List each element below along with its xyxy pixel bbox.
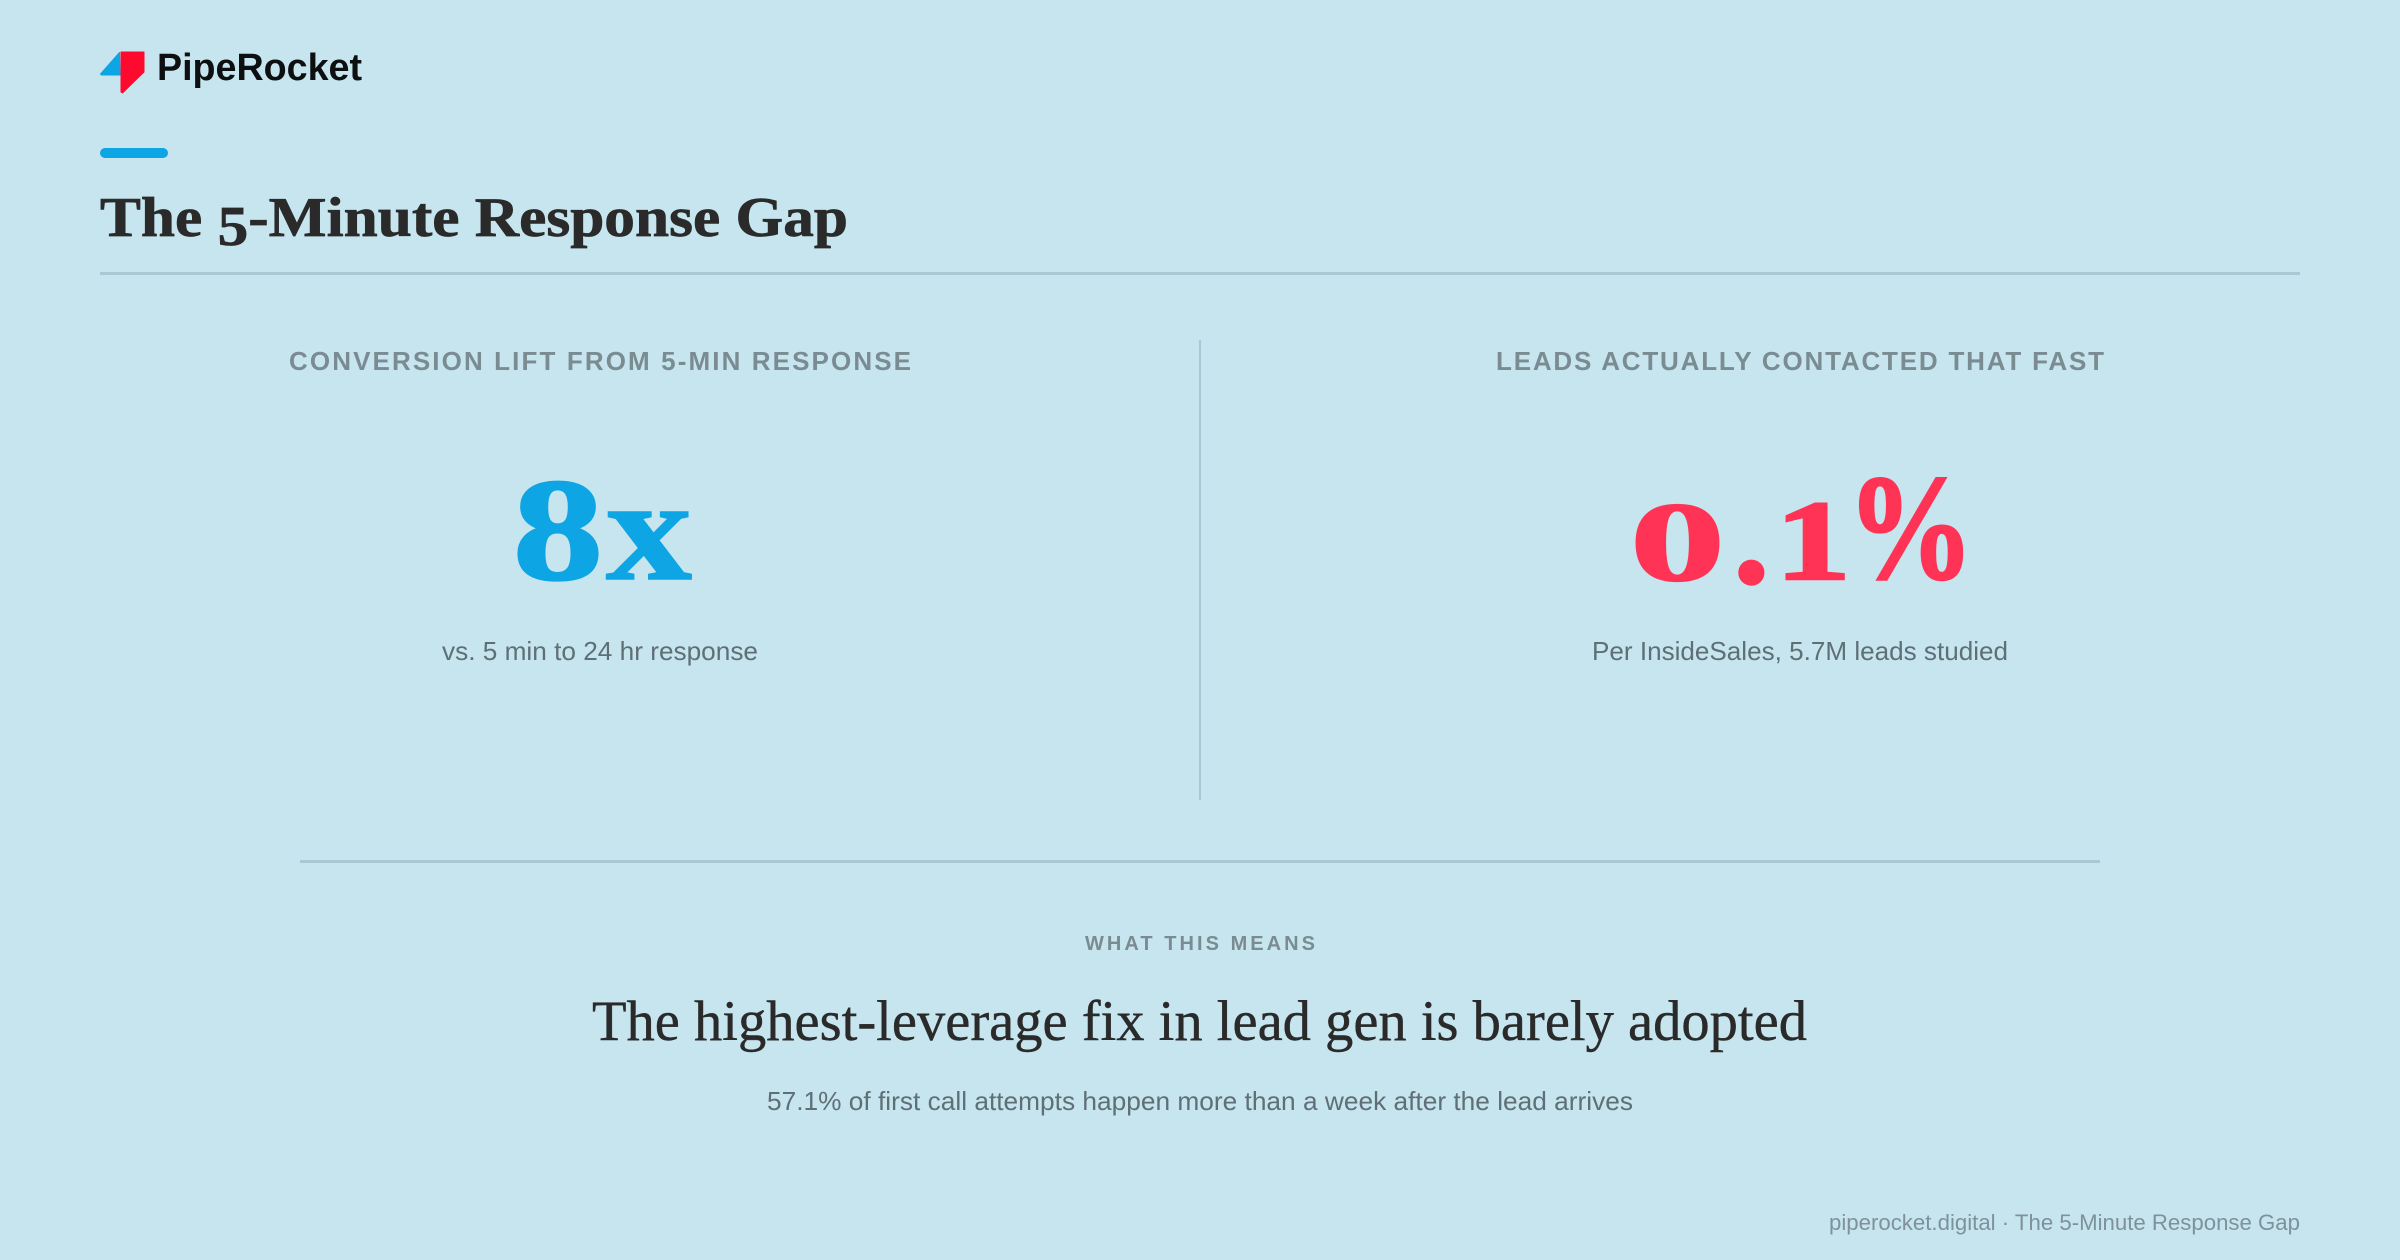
- title: 5: [218, 196, 248, 258]
- big number: 8x: [513, 449, 692, 611]
- title: The: [100, 187, 193, 249]
- big number: 8x: 8: [513, 449, 603, 611]
- eyebrow: WHAT THIS MEANS: [1085, 933, 1315, 955]
- panel: conversion lift: [289, 346, 911, 666]
- accent bar: [100, 148, 168, 158]
- panel heading: LEADS ACTUALLY CONTACTED THAT FAST: [1496, 346, 2104, 376]
- big number: 0.1%: 0: [1630, 480, 1725, 605]
- big number: 0.1%: 1: [1775, 477, 1851, 604]
- wordmark: PipeRocket: [157, 47, 362, 89]
- panel heading: CONVERSION LIFT FROM 5-MIN RESPONSE: [289, 346, 911, 376]
- caption: vs. 5 min to 24 hr response: [442, 636, 758, 666]
- center divider: [1199, 340, 1201, 800]
- takeaway section: [592, 933, 1807, 1116]
- footer: piperocket.digital · The 5-Minute Response Gap: [1829, 1210, 2300, 1235]
- logo: PipeRocket: [100, 47, 362, 93]
- icon: rocket mark: [100, 52, 144, 93]
- big number: 8x: x: [606, 449, 692, 611]
- title: -Minute Response Gap: [248, 187, 848, 249]
- headline: The highest-leverage fix in lead gen is barely adopted: [592, 990, 1807, 1053]
- big number: 0.1%: [1630, 445, 1974, 617]
- big number: 0.1%: %: [1847, 445, 1974, 611]
- supporting text: 57.1% of first call attempts happen more than a week after the lead arrives: [767, 1086, 1633, 1116]
- big number: 0.1%: .: [1732, 445, 1771, 617]
- panel: leads contacted: [1496, 346, 2104, 666]
- caption: Per InsideSales, 5.7M leads studied: [1592, 636, 2008, 666]
